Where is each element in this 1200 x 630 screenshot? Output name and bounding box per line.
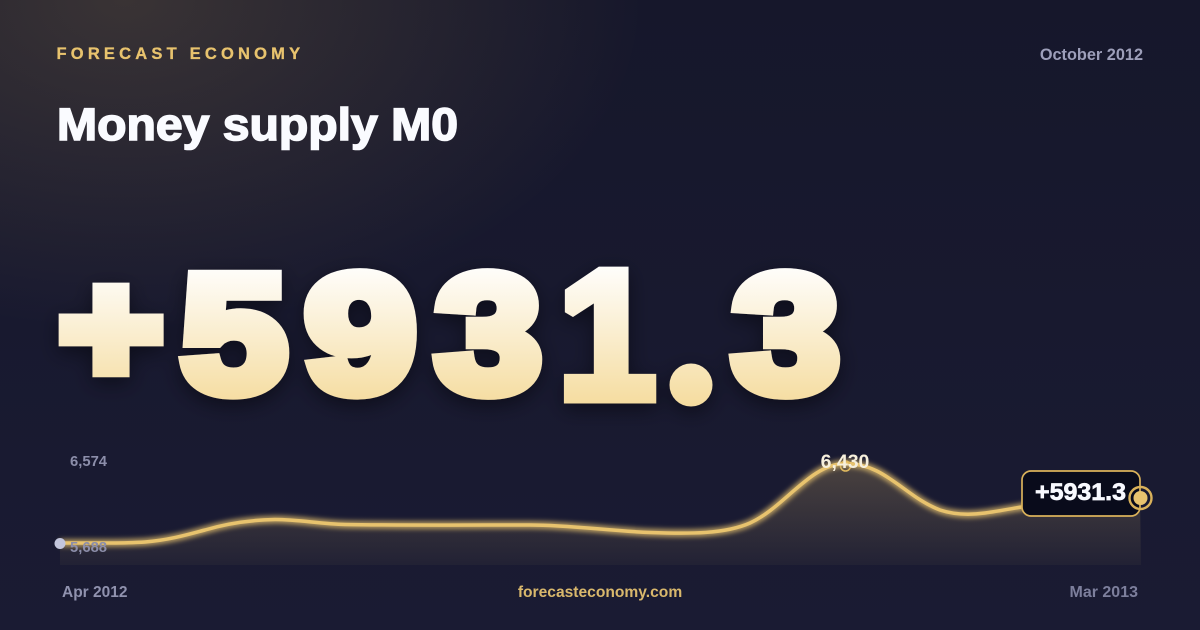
start dot: [54, 538, 66, 549]
hero value: 9: [305, 241, 416, 426]
hero value: +: [60, 241, 162, 414]
end date label: Mar 2013: [1070, 584, 1138, 601]
min axis label: 5,688: [70, 540, 107, 556]
peak label: 6,430: [821, 451, 870, 473]
date label: October 2012: [1040, 46, 1143, 64]
line glow: [60, 463, 1040, 543]
line: [60, 463, 1040, 543]
hero value: 3: [733, 241, 839, 426]
brand label: FORECAST ECONOMY: [56, 45, 304, 63]
peak marker: [840, 461, 850, 471]
end marker: [1130, 487, 1152, 509]
hero value: 5: [181, 241, 287, 426]
end value tag: +5931.3: [1035, 479, 1126, 506]
hero value: [60, 234, 839, 438]
area fill: [60, 463, 1141, 565]
hero value: 3: [436, 241, 541, 426]
end value tag: [1022, 471, 1140, 516]
hero value: 1: [558, 234, 656, 438]
website label: forecasteconomy.com: [518, 584, 682, 601]
hero value: .: [670, 262, 712, 430]
start date label: Apr 2012: [62, 584, 127, 601]
title: Money supply M0: [57, 99, 458, 150]
max axis label: 6,574: [70, 454, 108, 470]
sparkline chart: [54, 451, 1152, 565]
